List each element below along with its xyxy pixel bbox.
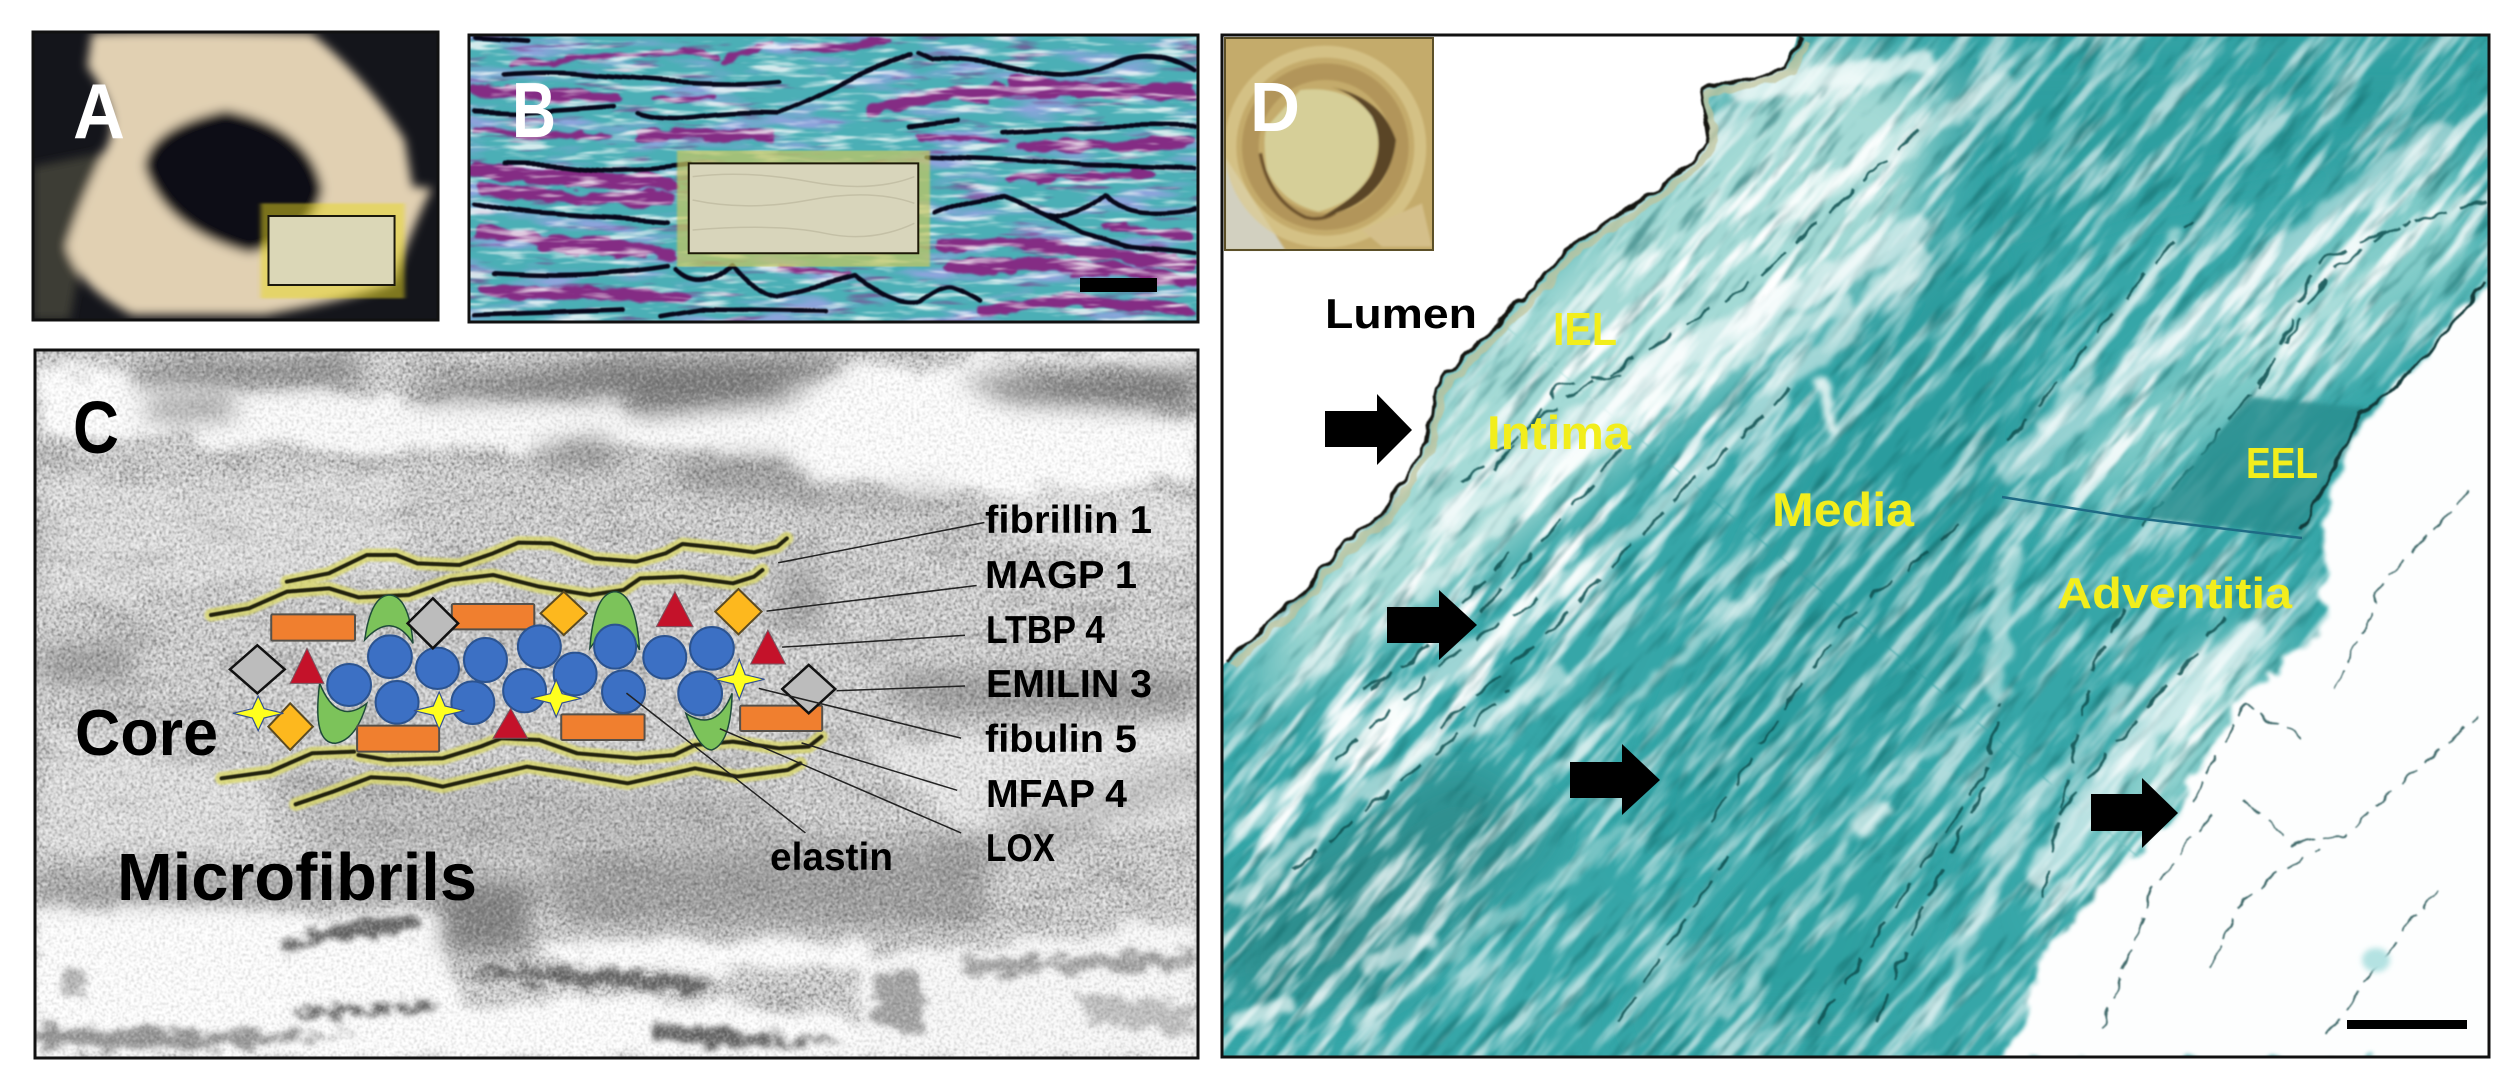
red triangles LOX [290,592,786,738]
label A: A [73,67,125,155]
label C: C [73,386,119,469]
black elastic fibres [475,38,1195,317]
heavier pale fibre streaks in intima zones [1222,35,2489,1057]
schematic: elastic fibre assembly [211,538,835,804]
label Microfibrils: Microfibrils [117,840,477,915]
orange LTBP rectangles [271,604,822,752]
border of panel D [1222,35,2489,1057]
lumen white area [1210,28,1802,677]
label Adventitia: Adventitia [2057,569,2293,618]
horizontal tissue crack [2002,497,2302,538]
dark micrograph streaks [39,918,1195,1049]
outer white background with adventitial edge [2002,269,2510,1064]
EEL dark wedge [2143,397,2364,535]
micrograph light and dark tones [31,352,1198,1060]
gold diamonds MAGP [268,589,762,750]
label Lumen: Lumen [1325,290,1477,337]
wall edge and elastic lamina [1227,38,2485,668]
scale bar D [2347,1020,2467,1029]
blue elastin core globules [327,625,734,724]
scattered fibres on white adventitia [2102,483,2477,1036]
protein name labels: EMILIN 3 [986,663,1152,706]
panel A: aortic ring photo [33,32,438,320]
inset photo of vessel ring [1225,38,1433,250]
pale collagen bands [1235,62,2460,1022]
diagonal fibre streak texture [1222,35,2489,1057]
label Media: Media [1772,483,1915,536]
arrow: adventitia edge [2091,778,2178,848]
highlight box on ring [261,203,405,298]
purple collagen streaks [475,42,1191,310]
microfibril glow bands [211,538,821,804]
arrow: outer media [1570,744,1660,815]
microfibril lines [211,538,821,804]
highlight box on section [677,151,930,267]
border of panel C [35,350,1198,1058]
protein name labels: LOX [986,827,1055,870]
teal speck on white [2362,948,2390,972]
arrow: inner media [1387,590,1477,660]
border of panel B [469,35,1198,322]
label B: B [512,66,556,154]
protein name labels: LTBP 4 [986,609,1105,652]
green MFAP shapes [318,592,732,750]
panel B: stained histology section [469,35,1198,322]
label EEL: EEL [2246,439,2318,488]
panel C: electron micrograph with elastic fibre schematic [31,350,1198,1060]
protein name labels: elastin [770,836,893,879]
protein name labels [770,499,1152,879]
protein name labels: MAGP 1 [985,554,1137,597]
protein name labels: fibulin 5 [985,718,1137,761]
label Core: Core [75,696,218,769]
label IEL: IEL [1553,303,1617,355]
protein name labels: fibrillin 1 [985,499,1152,542]
leader lines [626,522,984,833]
panel D: stained arterial wall section [1210,28,2510,1064]
yellow stars fibulin [233,659,765,731]
dark fibre cracks [1293,124,2485,1022]
label D: D [1250,68,1300,146]
border of panel A [33,32,438,320]
scale bar B [1080,278,1157,292]
arrow: intima [1325,394,1412,465]
protein name labels: MFAP 4 [986,773,1127,816]
grey diamonds EMILIN [230,598,835,713]
label Intima: Intima [1487,406,1632,459]
broad teal tone variations [1227,41,2489,1036]
